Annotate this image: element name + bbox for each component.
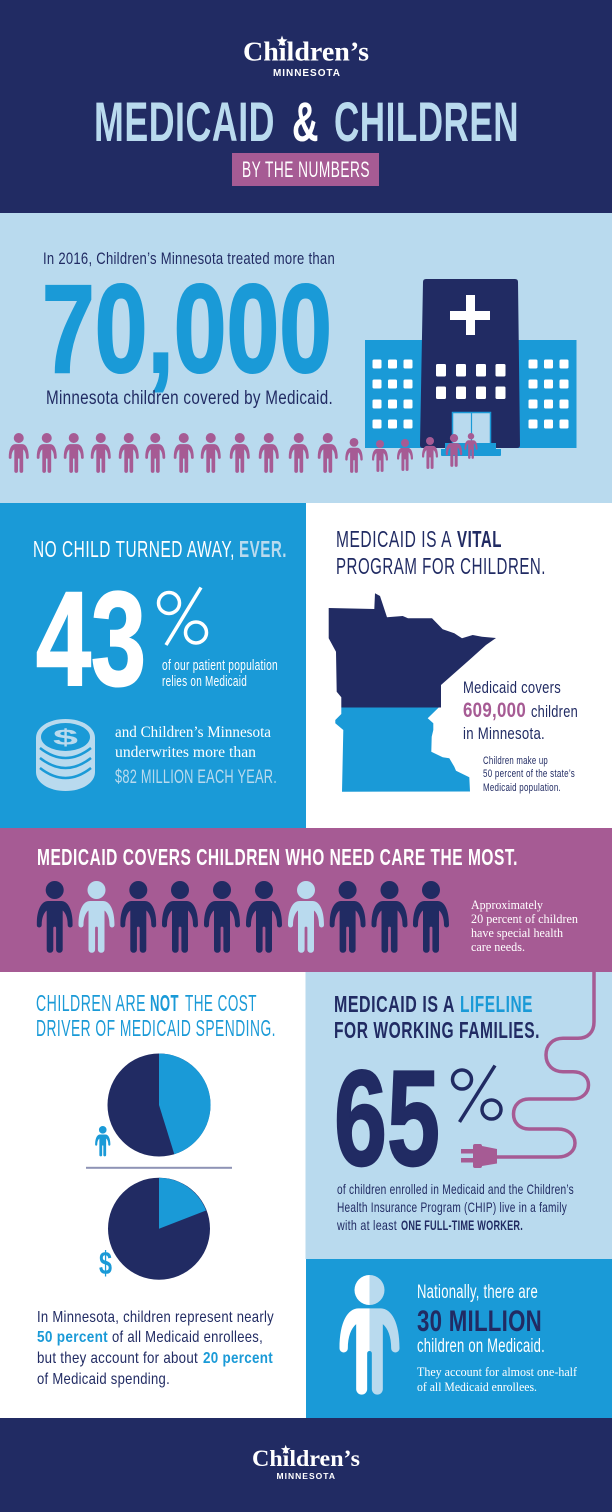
caption: Minnesota children covered by Medicaid. — [46, 388, 333, 409]
map: Minnesota — [329, 593, 496, 792]
icon: coin stack: $ — [53, 725, 78, 750]
heading: NOT — [150, 990, 179, 1016]
panel: footer — [0, 1418, 612, 1512]
people row — [37, 881, 449, 953]
underwriting text: $82 MILLION EACH YEAR. — [115, 766, 277, 788]
heading: CHILDREN ARE — [36, 990, 146, 1016]
stat text — [417, 1282, 545, 1357]
note: 50 percent of the state’s — [483, 768, 575, 780]
title: MEDICAID — [94, 90, 275, 153]
pie chart: enrollees — [108, 1053, 211, 1156]
people queue — [9, 433, 478, 473]
body text — [37, 1309, 274, 1388]
note — [417, 1364, 578, 1394]
title — [94, 90, 519, 153]
title: & — [292, 90, 319, 153]
caption — [162, 658, 278, 690]
panel: not the cost driver — [0, 972, 306, 1418]
stat: 609,000 children: in Minnesota. — [463, 724, 545, 743]
icon: half-tone child — [340, 1275, 400, 1395]
logo: Children's Minnesota: MINNESOTA — [273, 68, 340, 79]
body text: 20 percent — [203, 1350, 273, 1367]
panel: 30 million children nationally — [306, 1259, 612, 1418]
note: have special health — [471, 926, 564, 940]
badge: by the numbers: BY THE NUMBERS — [242, 157, 370, 182]
heading — [336, 526, 546, 579]
body text — [336, 1181, 574, 1233]
big number 70,000: 70,000 — [42, 260, 332, 399]
note — [471, 898, 579, 954]
heading: EVER. — [239, 536, 287, 562]
body text: In Minnesota, children represent nearly — [37, 1309, 274, 1326]
intro text: In 2016, Children’s Minnesota treated more than — [43, 249, 335, 268]
icon: hospital — [365, 279, 576, 456]
heading: THE COST — [185, 990, 257, 1016]
big number 65: 65 — [334, 1042, 440, 1194]
note: care needs. — [471, 940, 525, 954]
caption: relies on Medicaid — [162, 674, 247, 690]
note — [483, 755, 575, 794]
note: Medicaid population. — [483, 782, 561, 794]
icon: child — [95, 1126, 110, 1156]
logo: Children's Minnesota: Children’s — [252, 1446, 360, 1472]
stat: 609,000 children: Medicaid covers — [463, 678, 561, 697]
body text: ONE FULL-TIME WORKER. — [401, 1217, 523, 1233]
panel: lifeline for working families — [306, 972, 612, 1259]
stat text: children on Medicaid. — [417, 1336, 545, 1357]
panel: children who need care the most — [0, 828, 612, 972]
underwriting text — [115, 724, 277, 788]
note: 20 percent of children — [471, 912, 579, 926]
percent sign — [158, 588, 206, 645]
heading — [36, 990, 276, 1041]
body text: 50 percent — [37, 1329, 108, 1346]
panel: vital program — [306, 503, 612, 828]
panel: 70,000 children treated — [0, 213, 612, 503]
heading — [334, 991, 540, 1043]
heading: LIFELINE — [460, 991, 533, 1017]
panel: no child turned away — [0, 503, 306, 828]
note: They account for almost one-half — [417, 1364, 578, 1379]
heading: MEDICAID IS A — [334, 991, 455, 1017]
percent sign — [452, 1066, 501, 1122]
icon: dollar sign: $ — [99, 1245, 112, 1281]
pie chart: spending — [108, 1178, 210, 1280]
body text: of Medicaid spending. — [37, 1371, 170, 1388]
underwriting text: and Children’s Minnesota — [115, 724, 271, 741]
badge: by the numbers — [232, 153, 379, 186]
panel: header — [0, 0, 612, 213]
stat text: 30 MILLION — [417, 1305, 542, 1338]
icon: power cord and plug — [461, 972, 594, 1168]
logo: Children's Minnesota: Children’s — [243, 36, 369, 66]
note: Children make up — [483, 755, 548, 767]
note: Approximately — [471, 898, 544, 912]
logo: Children's Minnesota — [243, 36, 369, 79]
heading: DRIVER OF MEDICAID SPENDING. — [36, 1015, 276, 1041]
icon: coin stack — [36, 719, 95, 791]
heading: MEDICAID IS A — [336, 526, 452, 552]
body text: of all Medicaid enrollees, — [112, 1329, 263, 1346]
logo: Children's Minnesota: MINNESOTA — [276, 1471, 335, 1481]
stat: 609,000 children: children — [531, 702, 578, 721]
stat text: Nationally, there are — [417, 1282, 538, 1303]
heading: VITAL — [457, 526, 502, 552]
body text: with at least — [336, 1217, 397, 1233]
note: of all Medicaid enrollees. — [417, 1379, 537, 1394]
caption: of our patient population — [162, 658, 278, 674]
underwriting text: underwrites more than — [115, 744, 256, 761]
heading: NO CHILD TURNED AWAY, — [33, 536, 235, 562]
body text: but they account for about — [37, 1350, 198, 1367]
stat: 609,000 children — [463, 678, 578, 743]
stat: 609,000 children: 609,000 — [463, 699, 526, 722]
big number 43: 43 — [36, 565, 146, 714]
